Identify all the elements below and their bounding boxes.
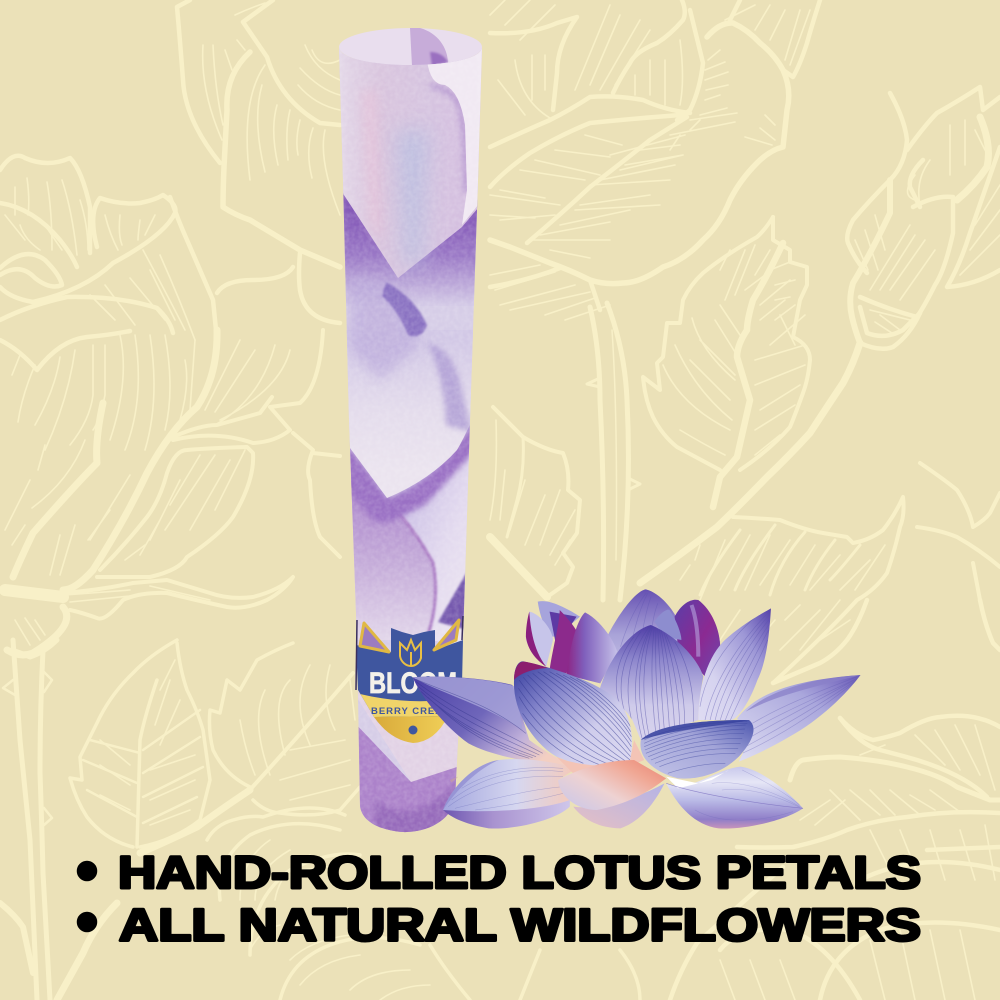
- bottom centre petal: [573, 783, 664, 828]
- moon symbols: [408, 726, 418, 734]
- petal flap shadow: [430, 86, 466, 192]
- branches: left: [5, 330, 217, 655]
- product label band: [356, 616, 463, 743]
- paper grain: [344, 79, 477, 832]
- flavor text: BERRY CREAM: [371, 706, 451, 717]
- rose base and sepals: left: [63, 330, 340, 619]
- soft lavender centre: [347, 293, 419, 380]
- central stem: [587, 303, 640, 600]
- bullet list: [78, 847, 921, 950]
- petal flap: [427, 44, 482, 225]
- left large petal: [514, 661, 632, 768]
- band: [356, 628, 463, 742]
- brand text: BLOOM: [369, 667, 457, 700]
- rolled lotus petal tube: [339, 28, 482, 832]
- purple band under pale petal: [346, 420, 474, 522]
- gold chevrons: [360, 620, 459, 652]
- gold banner: [358, 690, 460, 717]
- lower right petal: [402, 457, 469, 643]
- pale petal: [340, 330, 478, 498]
- tube body: [339, 48, 482, 832]
- bullet: hand-rolled lotus petals: HAND-ROLLED LOTUS PETALS: [118, 847, 921, 898]
- dark chevron at base: [358, 727, 457, 832]
- far right petal: [737, 675, 861, 762]
- base lavender: [339, 52, 477, 826]
- pale wrap below band: [358, 691, 458, 782]
- lower right petal: [666, 767, 803, 829]
- far left petal: [413, 677, 573, 767]
- pale upper section: [339, 50, 478, 278]
- tulip logo: [400, 640, 421, 666]
- front right petal: [640, 720, 754, 779]
- front peach petal: [558, 760, 666, 810]
- long stem: right: [640, 343, 860, 583]
- branches: far right: [917, 463, 1000, 600]
- leaf: beside lotus: [490, 407, 904, 683]
- tube inner rim: [339, 28, 482, 66]
- right upright petal: [698, 608, 771, 720]
- purple fade under top chevron: [343, 193, 478, 306]
- leaves and petals: lower right: [670, 600, 1000, 1000]
- rose outlines: upper left: [0, 0, 340, 370]
- blue streak: [396, 130, 428, 268]
- rose bud: right: [847, 87, 1000, 349]
- leaf: bottom left: [57, 640, 250, 1000]
- large rose: upper right of tube: [490, 0, 820, 310]
- leaf: centre right: [643, 217, 810, 507]
- pink streak: [362, 90, 382, 240]
- bullet: all natural wildflowers: ALL NATURAL WILDFLOWERS: [119, 900, 921, 950]
- back petals: [526, 589, 720, 683]
- leaf: bottom centre left: [207, 643, 640, 1000]
- dark inner fold: [382, 282, 427, 336]
- centre large petal: [599, 625, 703, 740]
- lotus flower: [413, 589, 861, 829]
- peach heart: [556, 740, 644, 777]
- stem and leaves: lower left: [0, 640, 57, 1000]
- dark band edge: [356, 616, 463, 690]
- lower left petals: [443, 759, 577, 829]
- lower left petal: [350, 480, 435, 640]
- mid petal shadow: [428, 343, 472, 432]
